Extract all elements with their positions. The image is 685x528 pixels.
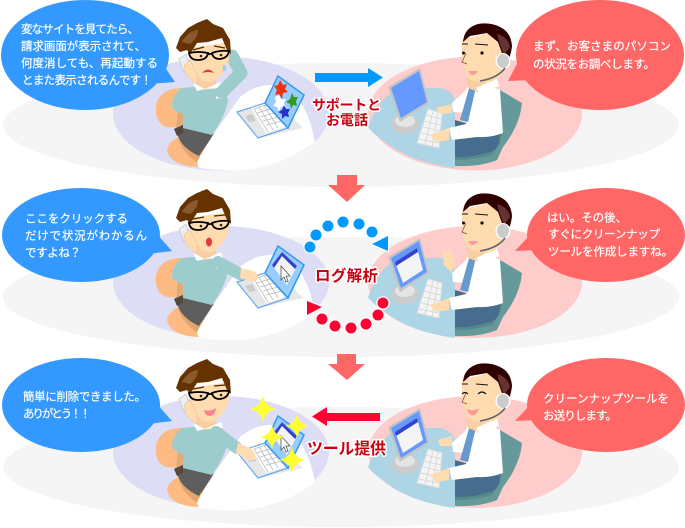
speech bubble: support row 3: お送りします。 xyxy=(543,408,617,422)
background row 2 xyxy=(3,237,679,357)
figure: surprised customer clicking xyxy=(156,189,315,340)
arrow: down to step 2 xyxy=(328,175,365,202)
panel: row 2 customer circle xyxy=(113,226,329,338)
speech bubble: customer row 1: とまた表示されるんです！ xyxy=(22,74,152,87)
figure: support agent with headset xyxy=(368,23,522,168)
speech bubble: support row 3: クリーンナップツールを xyxy=(543,392,669,406)
speech bubble: customer row 3: ありがとう！！ xyxy=(23,406,91,420)
label: support call: お電話 xyxy=(326,112,368,128)
figure: worried customer on phone xyxy=(156,19,315,170)
panel: row 1 support circle xyxy=(368,56,582,170)
panel: row 3 customer circle xyxy=(113,396,329,508)
label: tool delivery: ツール提供 xyxy=(307,440,386,458)
speech bubble: support row 1: の状況をお調べします。 xyxy=(533,57,655,71)
panel: row 1 customer circle xyxy=(113,56,329,170)
arrow: phone call to support xyxy=(315,68,383,87)
speech bubble: support row 2: はい。その後、 xyxy=(547,210,627,224)
speech bubble: support row 1 xyxy=(508,0,684,110)
speech bubble: support row 2: ツールを作成しますね。 xyxy=(548,246,673,258)
speech bubble: support row 1: まず、お客さまのパソコン xyxy=(533,39,671,53)
label: support call xyxy=(312,97,381,128)
speech bubble: customer row 1: 変なサイトを見てたら、 xyxy=(21,23,139,36)
arrow: tool delivery xyxy=(312,407,380,426)
speech bubble: customer row 1 xyxy=(1,0,175,110)
speech bubble: customer row 1: 請求画面が表示されて、 xyxy=(21,39,146,53)
speech bubble: support row 2 xyxy=(515,188,685,282)
figure: agent row 2 xyxy=(368,193,522,338)
panel: row 2 support circle xyxy=(368,226,582,338)
speech bubble: customer row 1: 何度消しても、再起動する xyxy=(21,56,158,70)
speech bubble: customer row 3 xyxy=(2,358,172,452)
speech bubble: customer row 2: だけで状況がわかるん xyxy=(25,228,147,242)
panel: row 3 support circle xyxy=(368,396,582,508)
speech bubble: customer row 2: ですよね？ xyxy=(25,246,81,260)
cycle: red dots and arrow xyxy=(307,298,388,334)
speech bubble: customer row 2 xyxy=(2,188,172,282)
speech bubble: customer row 2: ここをクリックする xyxy=(25,212,128,226)
background row 3 xyxy=(3,407,679,527)
figure: happy customer with fixed laptop xyxy=(156,359,315,510)
arrow: down to step 3 xyxy=(328,354,365,380)
cycle: blue dots and arrow xyxy=(304,216,388,252)
speech bubble: customer row 3: 簡単に削除できました。 xyxy=(23,390,146,404)
label: support call: サポートと xyxy=(312,97,381,113)
speech bubble: support row 2: すぐにクリーンナップ xyxy=(548,228,660,241)
speech bubble: support row 3 xyxy=(515,358,685,452)
icon: sparkles xyxy=(250,395,309,474)
label: log analysis: ログ解析 xyxy=(315,266,378,285)
figure: smiling agent xyxy=(368,363,522,508)
background row 1 xyxy=(3,63,679,187)
